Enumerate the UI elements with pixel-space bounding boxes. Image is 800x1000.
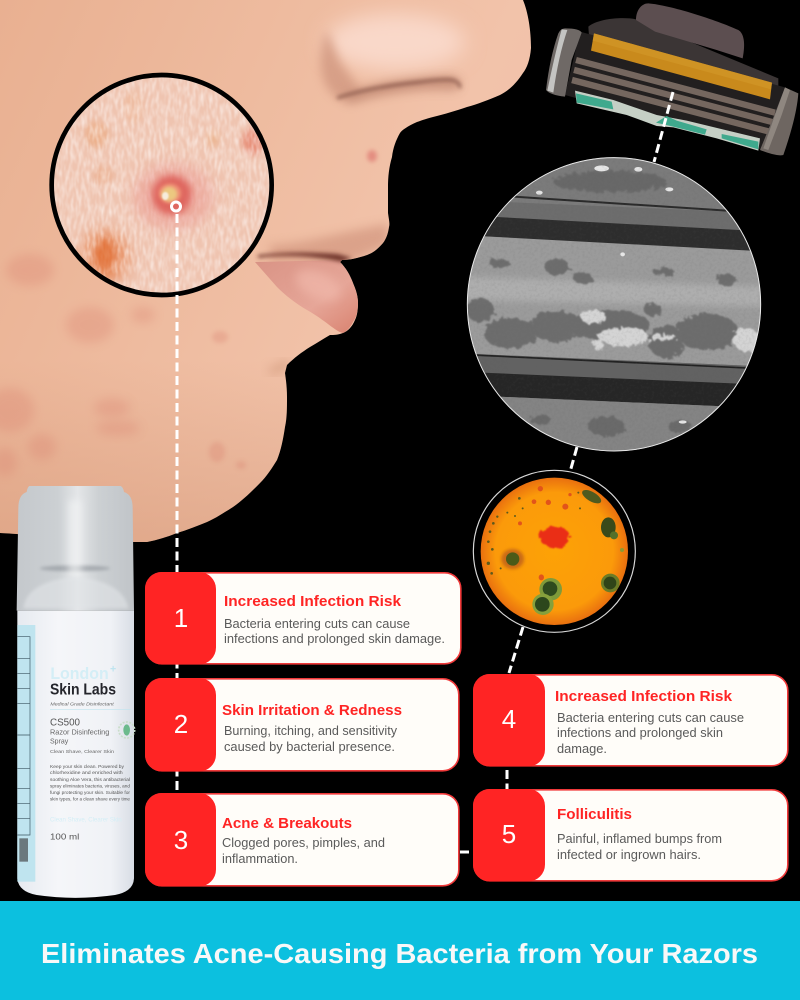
- mouth line: [258, 253, 352, 262]
- red colony: [540, 527, 570, 548]
- card 4: [473, 674, 788, 766]
- card 5: [473, 789, 788, 882]
- razor handle plate: [636, 3, 744, 58]
- spot under nose: [367, 150, 377, 162]
- card 5: infected or ingrown hairs.: [557, 848, 701, 862]
- dashed connector: pimple down through cards 1 to 3: [176, 214, 178, 793]
- card 3: 3: [174, 825, 188, 855]
- upper lip shadow: [270, 224, 388, 262]
- corrosion stains: [466, 171, 738, 437]
- product: spray bottle: [17, 486, 135, 898]
- bottle label text: [50, 664, 131, 842]
- card 3: [145, 793, 459, 886]
- card 1: [145, 572, 461, 664]
- dashed connector: razor to microscope view: [654, 92, 673, 162]
- bottle label text: Keep your skin clean. Powered by: [50, 764, 125, 769]
- bottle label text: +: [110, 664, 116, 676]
- dashed connector: card 4 to card 5: [506, 770, 508, 789]
- target ring on pimple: [172, 202, 180, 211]
- bottom banner: Eliminates Acne-Causing Bacteria from Your Razors: [41, 938, 758, 969]
- bottle label text: soothing Aloe Vera, this antibacterial: [50, 777, 130, 782]
- lower lip: [255, 260, 358, 333]
- card 2: [145, 678, 459, 772]
- card 1: Bacteria entering cuts can cause: [224, 617, 410, 631]
- bottom banner: [0, 901, 800, 1000]
- qr code: [19, 838, 28, 862]
- card 4: Bacteria entering cuts can cause: [557, 711, 744, 725]
- chin crease: [270, 362, 288, 372]
- card 1: Increased Infection Risk: [224, 593, 402, 610]
- microscope view of blade: [460, 150, 770, 460]
- razor hood: [588, 18, 778, 100]
- bottle label text: Clean Shave, Clearer Skin: [50, 817, 122, 824]
- bottle label text: Skin Labs: [50, 682, 116, 699]
- card 2: Skin Irritation & Redness: [222, 702, 402, 719]
- card 3: inflammation.: [222, 852, 298, 866]
- magnified skin circle: [50, 73, 277, 300]
- card 3: Clogged pores, pimples, and: [222, 836, 385, 850]
- dashed connector: card 3 to card 5: [460, 850, 473, 854]
- card 5: 5: [502, 819, 516, 849]
- dashed connector: petri dish to card 4: [509, 627, 523, 673]
- card 4: Increased Infection Risk: [555, 688, 733, 705]
- bottle label text: 100 ml: [50, 832, 80, 842]
- card 1: infections and prolonged skin damage.: [224, 632, 445, 646]
- bottle body: [17, 611, 134, 898]
- razor blades: [572, 60, 775, 132]
- clogged debris strip: [575, 91, 760, 151]
- vegan badge: [119, 722, 135, 738]
- left end cap: [546, 28, 582, 97]
- bottle label text: chlorhexidine and enriched with: [50, 770, 123, 775]
- bottle label text: skin types, for a clean shave every time: [50, 796, 130, 801]
- razor cartridge photo: [546, 3, 798, 155]
- bottle label text: Medical Grade Disinfectant: [50, 701, 114, 707]
- gold strip: [591, 33, 772, 99]
- blue side label: [17, 625, 35, 882]
- bottle label text: CS500: [50, 718, 80, 729]
- dashed connector: microscope view to petri dish: [570, 447, 577, 472]
- nose shading: [321, 14, 465, 104]
- right end cap: [760, 87, 798, 155]
- cheek blemishes: [0, 254, 246, 476]
- bottle label text: Spray: [50, 737, 69, 746]
- card 2: caused by bacterial presence.: [224, 740, 395, 754]
- petri dish: [473, 470, 635, 632]
- razor frame: [565, 32, 785, 150]
- bottle label text: fungi protecting your skin. Suitable for: [50, 790, 130, 795]
- card 3: Acne & Breakouts: [222, 815, 352, 832]
- bottle label text: London: [50, 664, 109, 683]
- bright debris: [580, 310, 760, 351]
- bottle label text: Razor Disinfecting: [50, 728, 109, 737]
- card 4: infections and prolonged skin: [557, 726, 723, 740]
- card 1: 1: [174, 603, 188, 633]
- card 5: Folliculitis: [557, 806, 632, 823]
- card 4: 4: [502, 704, 516, 734]
- face photo: [0, 0, 540, 545]
- green colonies: [501, 487, 624, 615]
- bottle label text: Clean Shave, Clearer Skin: [50, 749, 114, 755]
- small colonies: [487, 492, 581, 575]
- card 4: damage.: [557, 742, 607, 756]
- card 2: 2: [174, 709, 188, 739]
- bottle cap: [17, 486, 134, 611]
- card 5: Painful, inflamed bumps from: [557, 832, 722, 846]
- bottle label text: spray eliminates bacteria, viruses, and: [50, 783, 130, 788]
- card 2: Burning, itching, and sensitivity: [224, 724, 398, 738]
